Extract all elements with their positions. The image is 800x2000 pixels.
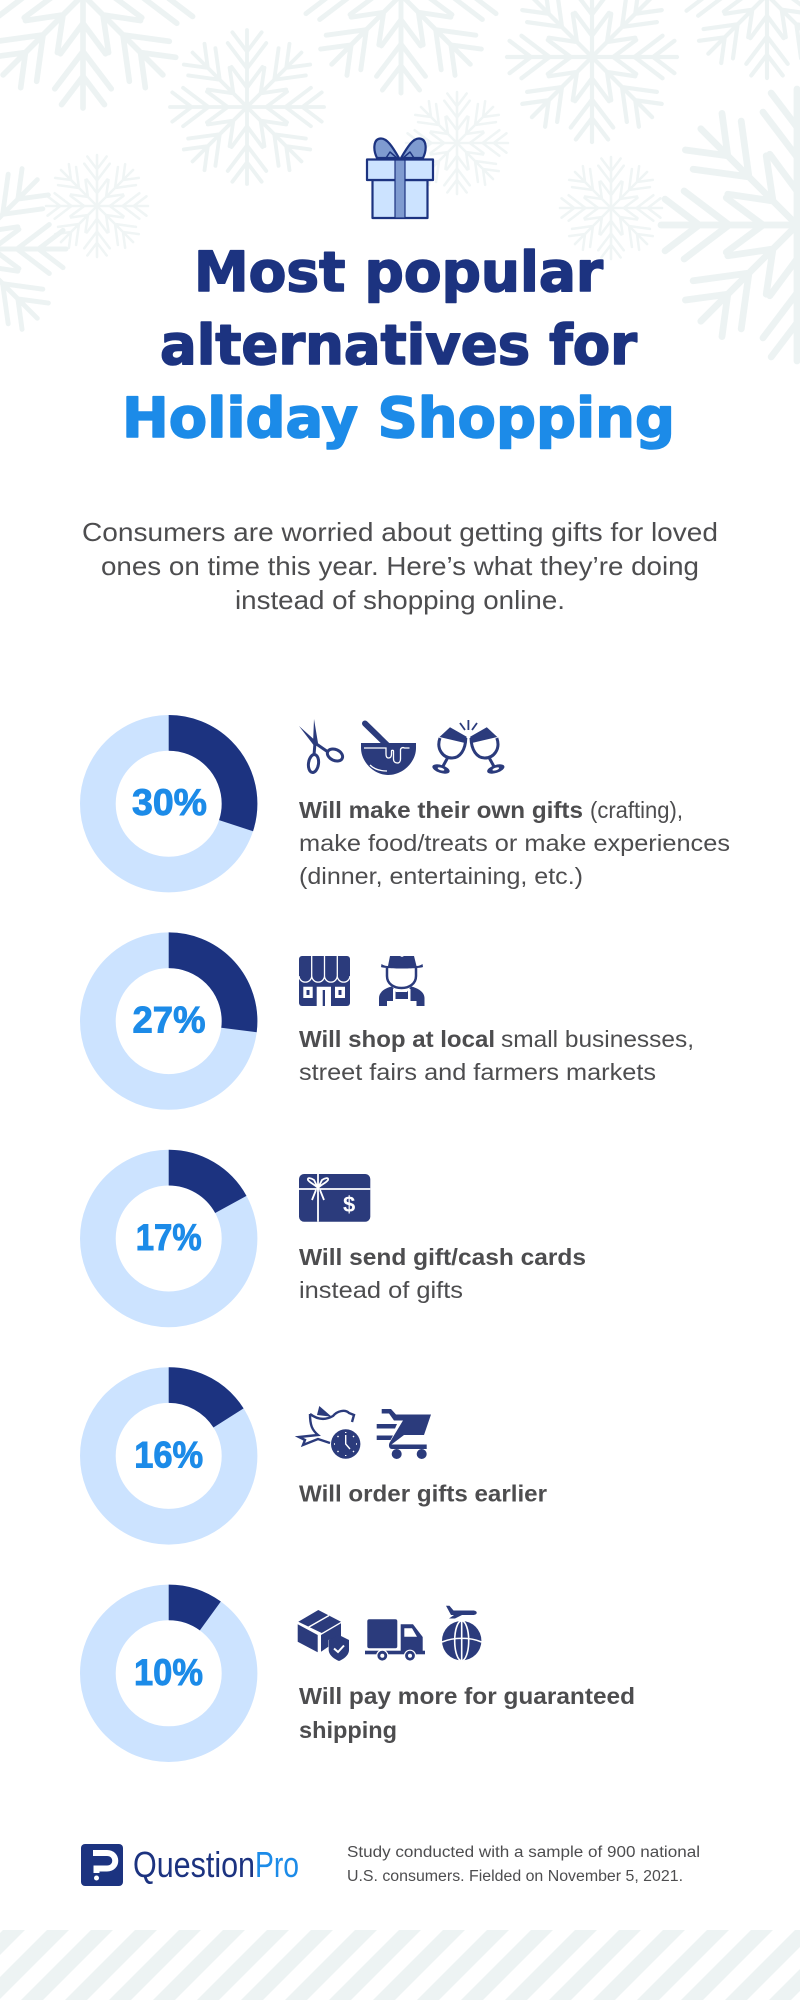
footer stripes xyxy=(0,1930,800,2000)
title: Most popular xyxy=(194,240,603,304)
footnote: study details: Study conducted with a sample of 900 national xyxy=(347,1844,700,1861)
icon: package with shield xyxy=(298,1610,349,1661)
panel: 27 percent shop local xyxy=(98,950,694,1092)
donut chart: 30%: 30% xyxy=(132,782,207,823)
title: Holiday Shopping xyxy=(122,386,675,450)
intro paragraph: instead of shopping online. xyxy=(235,585,565,615)
title: alternatives for xyxy=(160,313,637,377)
icon: globe with airplane xyxy=(442,1606,482,1661)
icon: shopping cart xyxy=(377,1409,431,1459)
icon: clinking wine glasses xyxy=(431,720,506,776)
donut chart: 27%: 27% xyxy=(132,1000,206,1040)
description: shop local xyxy=(299,1026,694,1085)
panel: 16 percent order earlier xyxy=(98,1385,547,1527)
footnote: study details: U.S. consumers. Fielded on November 5, 2021. xyxy=(347,1868,683,1885)
title xyxy=(122,240,675,450)
icon: delivery truck xyxy=(365,1619,425,1661)
donut chart: 10% xyxy=(98,1602,240,1744)
donut chart: 17% xyxy=(98,1168,240,1309)
icon: gift box xyxy=(367,138,433,218)
icon: gift card xyxy=(299,1174,370,1222)
description: gift cards: Will send gift/cash cards xyxy=(299,1244,586,1270)
description: make their own gifts: (dinner, entertaining, etc.) xyxy=(299,863,583,889)
panel: 30 percent make their own gifts xyxy=(98,719,730,889)
icon: scissors xyxy=(299,719,345,773)
icon: bird and clock xyxy=(299,1406,360,1459)
icon: mixing bowl xyxy=(361,724,416,775)
intro paragraph: ones on time this year. Here’s what they’re doing xyxy=(101,551,699,581)
intro paragraph: Consumers are worried about getting gifts for loved xyxy=(82,517,718,547)
donut chart: 10%: 10% xyxy=(134,1652,203,1693)
description: make their own gifts: (crafting), xyxy=(590,797,683,823)
description: shop local: street fairs and farmers markets xyxy=(299,1059,656,1085)
background snowflakes xyxy=(0,0,800,361)
logo: QuestionPro: Question xyxy=(133,1844,255,1885)
donut chart: 17%: 17% xyxy=(136,1217,202,1258)
description: shop local: Will shop at local xyxy=(299,1026,495,1052)
panel: 10 percent pay more for shipping xyxy=(98,1602,635,1744)
donut chart: 16%: 16% xyxy=(134,1434,203,1476)
description: guaranteed shipping xyxy=(299,1683,635,1743)
intro paragraph xyxy=(82,517,718,615)
donut chart: 30% xyxy=(98,733,240,875)
icon: farmer xyxy=(379,956,424,1006)
panel: 17 percent send gift cards xyxy=(98,1168,586,1309)
description: make their own gifts: make food/treats or make experiences xyxy=(299,830,730,856)
description: order earlier: Will order gifts earlier xyxy=(299,1480,547,1506)
description: make their own gifts xyxy=(299,797,730,889)
footnote: study details xyxy=(347,1844,700,1885)
logo: QuestionPro xyxy=(81,1844,299,1886)
donut chart: 16% xyxy=(98,1385,240,1527)
logo: QuestionPro: Pro xyxy=(255,1844,299,1885)
donut chart: 27% xyxy=(98,950,240,1092)
icon: gift card: $ xyxy=(343,1192,355,1217)
description: gift cards: instead of gifts xyxy=(299,1277,463,1303)
icon: storefront xyxy=(299,956,350,1006)
description: guaranteed shipping: Will pay more for guaranteed xyxy=(299,1683,635,1709)
description: gift cards xyxy=(299,1244,586,1303)
description: guaranteed shipping: shipping xyxy=(299,1717,397,1743)
description: make their own gifts: Will make their own gifts xyxy=(299,797,583,823)
description: shop local: small businesses, xyxy=(501,1026,694,1052)
